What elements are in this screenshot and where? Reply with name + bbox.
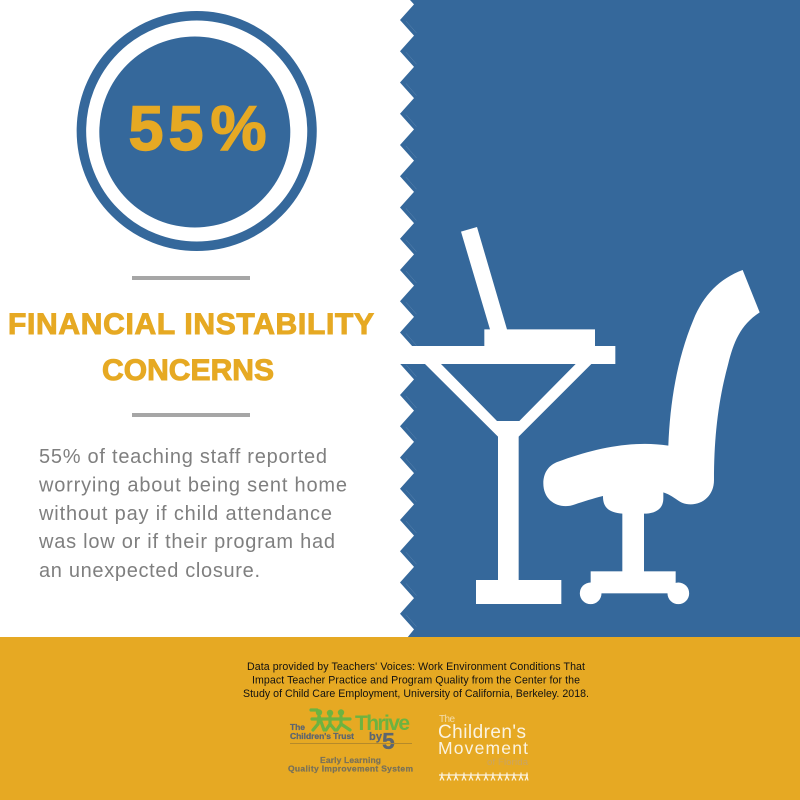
logo figures: three children bbox=[311, 709, 350, 730]
logo wordmark: Children's Trust bbox=[290, 731, 354, 741]
heading: FINANCIAL INSTABILITY bbox=[8, 308, 374, 341]
logo caption bbox=[288, 755, 413, 774]
source citation bbox=[243, 661, 589, 700]
logo wordmark: of Florida bbox=[487, 757, 529, 768]
logo figures: row of people bbox=[439, 772, 528, 780]
icon: desk with laptop and office chair bbox=[400, 227, 760, 604]
icon: laptop bbox=[461, 227, 595, 346]
body text bbox=[38, 446, 347, 582]
logo wordmark bbox=[290, 722, 395, 754]
panel: blue zigzag right side bbox=[400, 0, 800, 638]
divider bottom bbox=[132, 413, 250, 417]
logo wordmark: Movement bbox=[438, 738, 528, 758]
divider top bbox=[132, 276, 250, 280]
body text: without pay if child attendance bbox=[38, 503, 332, 525]
body text: 55% of teaching staff reported bbox=[39, 446, 327, 468]
body text: was low or if their program had bbox=[38, 531, 335, 553]
logo wordmark: Children's bbox=[438, 722, 526, 743]
logo caption: Quality Improvement System bbox=[288, 764, 413, 774]
logo caption: Early Learning bbox=[320, 755, 381, 765]
source citation: Study of Child Care Employment, University of California, Berkeley. 2018. bbox=[243, 688, 589, 700]
logo wordmark: The bbox=[439, 714, 455, 725]
source citation: Data provided by Teachers' Voices: Work Environment Conditions That bbox=[247, 661, 585, 673]
stat number: 55% bbox=[128, 94, 267, 164]
heading: CONCERNS bbox=[102, 354, 274, 387]
body text: worrying about being sent home bbox=[38, 474, 347, 496]
logo wordmark: 5 bbox=[382, 728, 395, 754]
logo: The Children's Trust Thrive by 5 bbox=[288, 709, 413, 774]
logo: The Children's Movement of Florida bbox=[438, 714, 529, 780]
icon: chair bbox=[543, 270, 760, 604]
body text: an unexpected closure. bbox=[39, 560, 260, 582]
logo wordmark: by bbox=[369, 731, 383, 743]
icon: desk bbox=[400, 346, 615, 604]
stat badge: 55% bbox=[81, 16, 312, 246]
panel: gold footer band bbox=[0, 637, 800, 800]
logo wordmark: The bbox=[290, 722, 305, 732]
logo wordmark bbox=[438, 714, 529, 768]
source citation: Impact Teacher Practice and Program Quality from the Center for the bbox=[252, 674, 580, 686]
heading bbox=[8, 308, 374, 387]
logo: Thrive: Thrive bbox=[355, 712, 410, 735]
